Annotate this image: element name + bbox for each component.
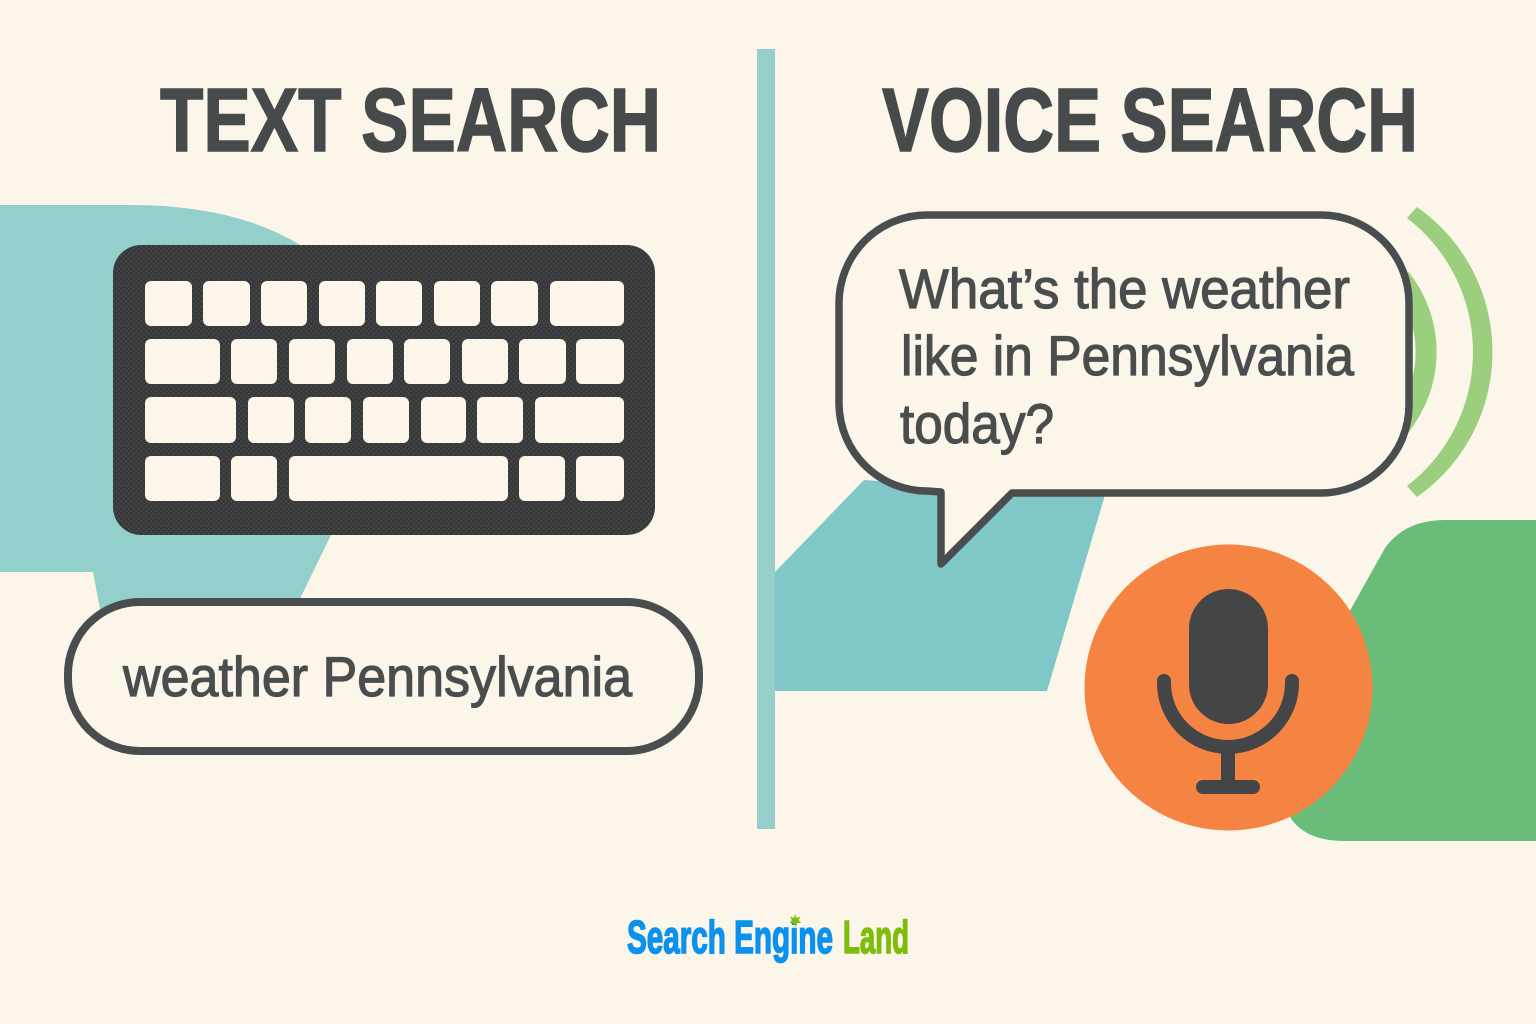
logo: Search Engine Land: Search Engine <box>627 911 833 963</box>
speech bubble <box>839 215 1409 564</box>
spoken query text: like in Pennsylvania <box>901 324 1355 387</box>
logo: Search Engine Land: Land <box>843 911 909 963</box>
icon: microphone <box>1084 544 1372 830</box>
spoken query text <box>899 257 1355 455</box>
spoken query text: today? <box>900 392 1054 455</box>
panel: voice search <box>775 71 1536 841</box>
background shape: green block <box>1290 520 1536 841</box>
panel: text search <box>0 71 699 751</box>
spoken query text: What’s the weather <box>899 257 1350 320</box>
background shape: teal trapezoid <box>775 480 1105 691</box>
heading: text search: TEXT SEARCH <box>160 71 661 171</box>
icon: sound waves <box>1400 207 1492 497</box>
background shape: teal blob behind keyboard <box>0 205 348 625</box>
search box <box>68 602 699 751</box>
search query text: weather Pennsylvania <box>122 645 633 708</box>
icon: keyboard <box>113 245 655 535</box>
divider <box>757 49 775 829</box>
